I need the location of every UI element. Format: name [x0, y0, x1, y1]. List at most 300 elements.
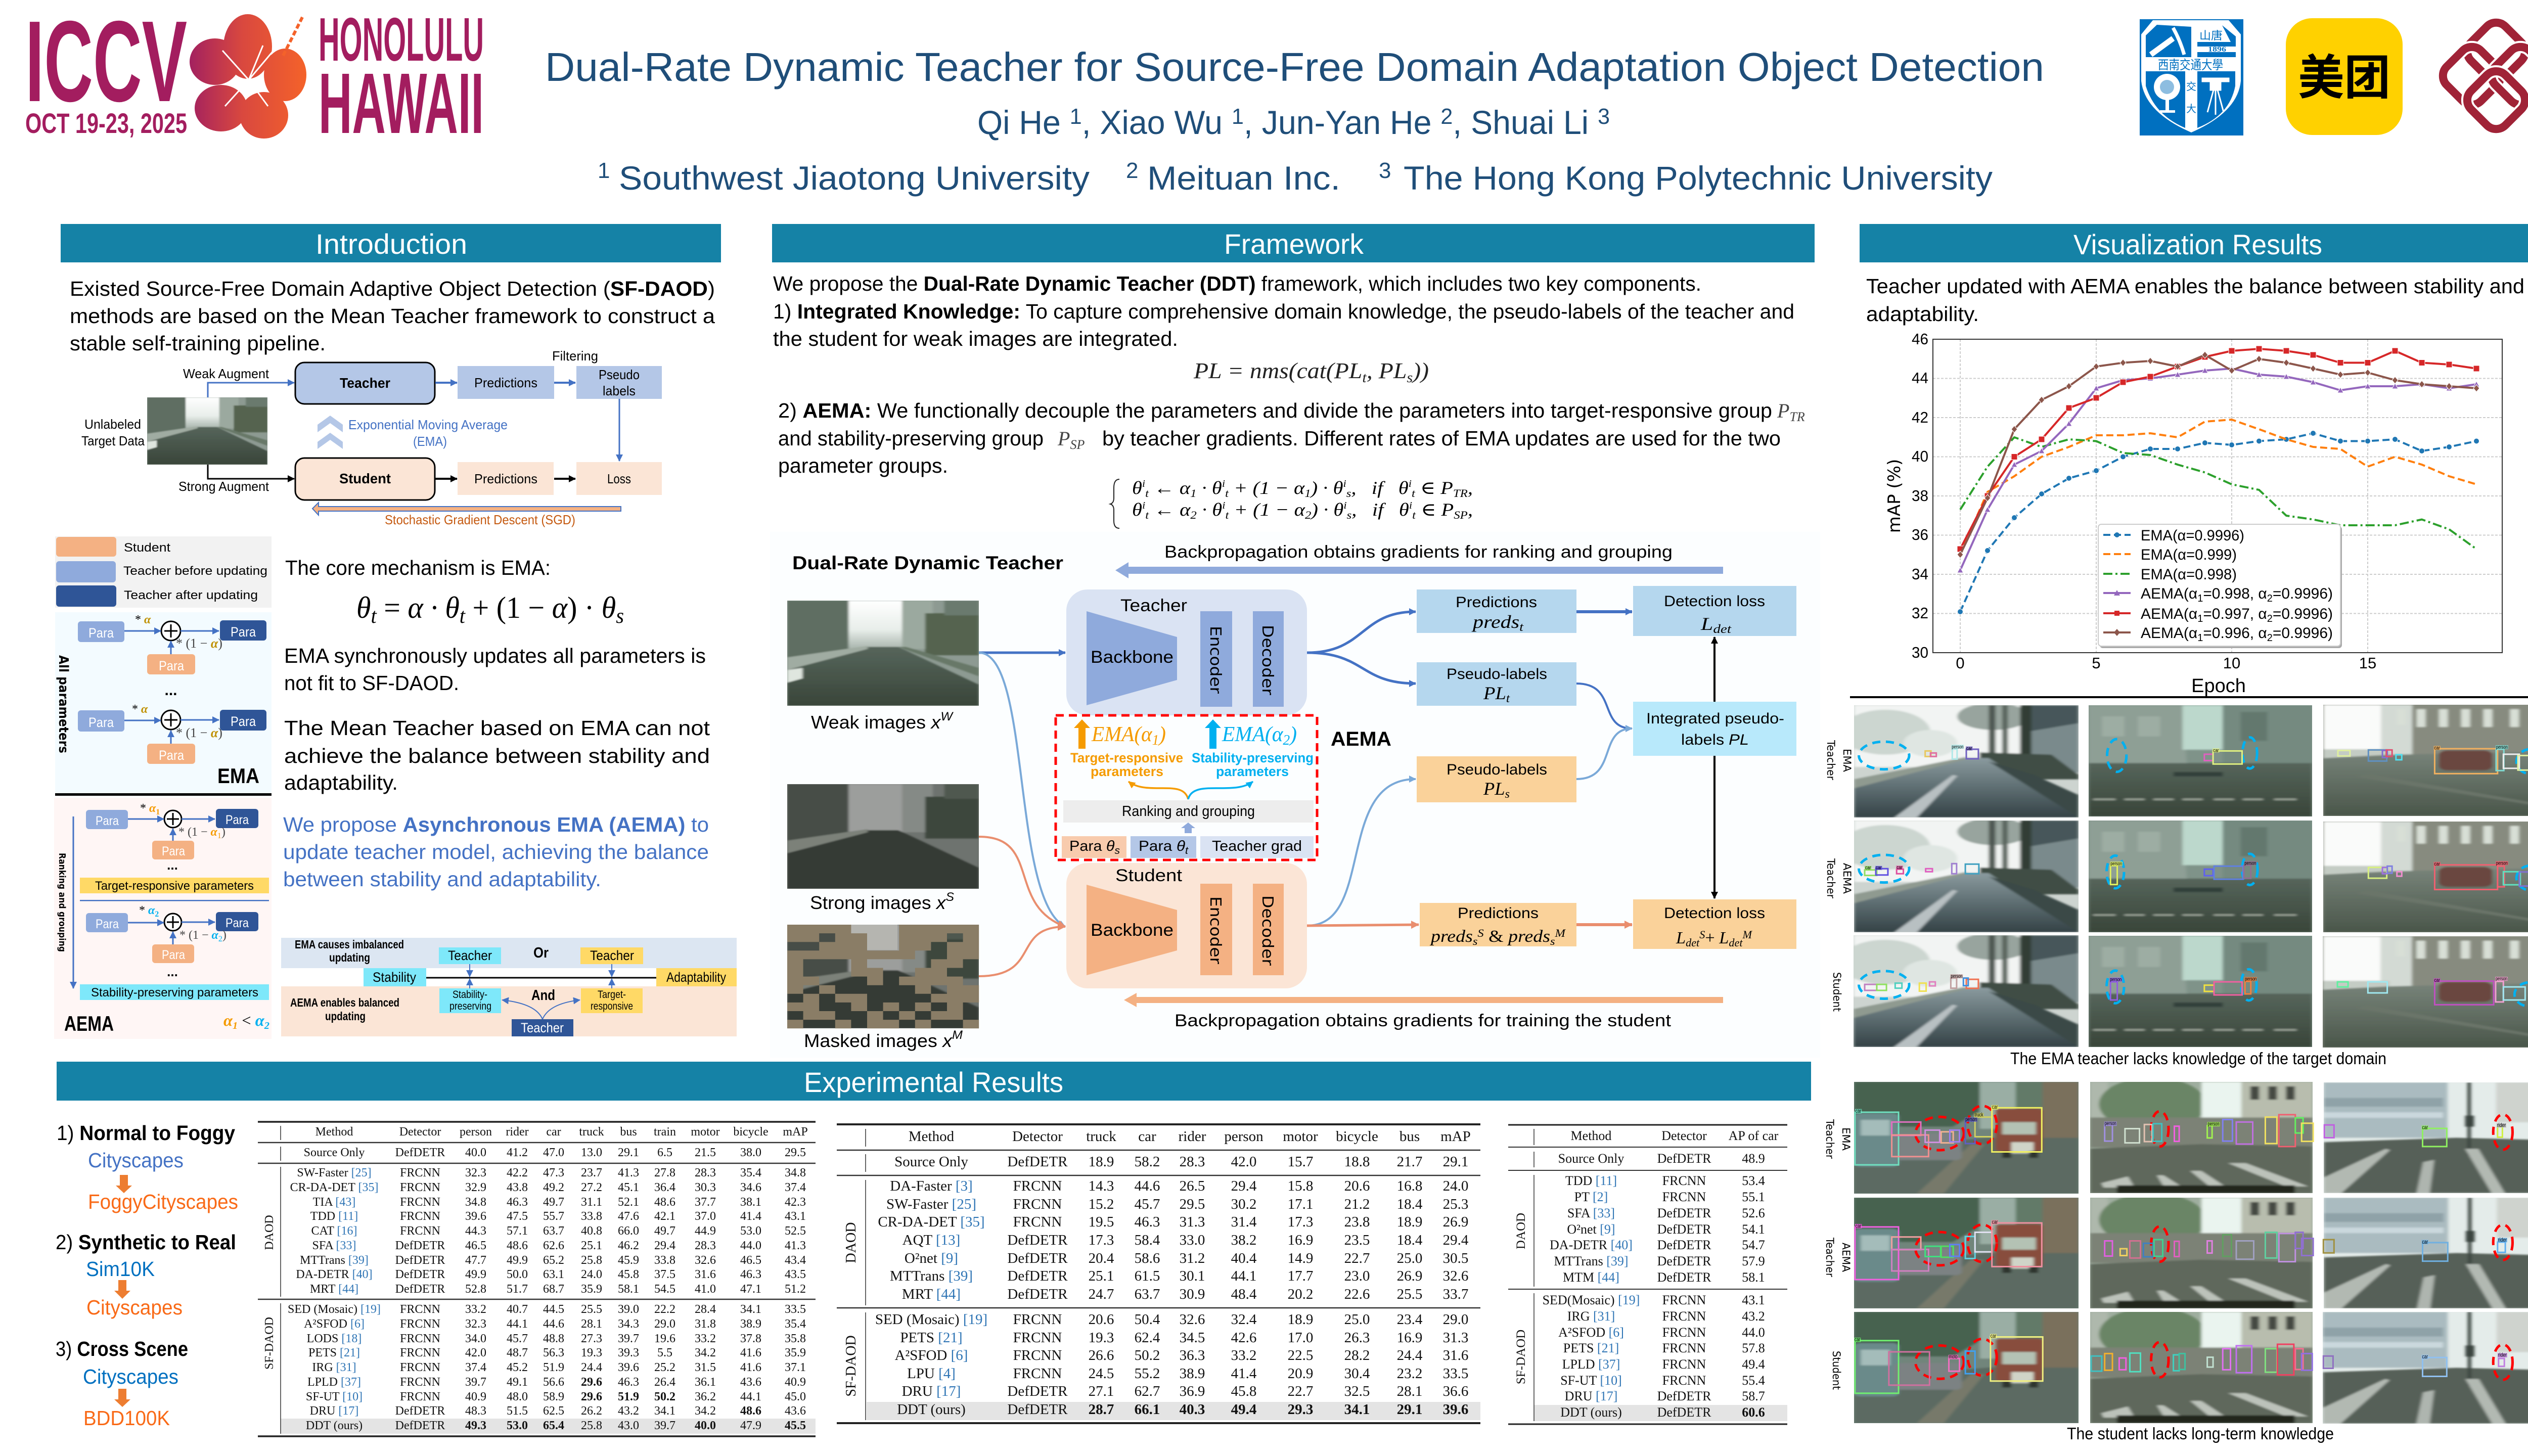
detections: long-term overlays: car: [1856, 1108, 1862, 1114]
table: Cross Scene results: 57.8: [1742, 1341, 1765, 1355]
table: Synthetic to Real results: 22.6: [1344, 1286, 1370, 1302]
table: Synthetic to Real results: 25.3: [1443, 1196, 1468, 1212]
table: Synthetic to Real results: [875, 1128, 1471, 1418]
table: Normal to Foggy results: 46.5: [740, 1254, 761, 1267]
table: Normal to Foggy results: 63.1: [543, 1268, 564, 1281]
table: Synthetic to Real results: SED (Mosaic) [19]: [875, 1311, 987, 1328]
table: Normal to Foggy results: DefDETR: [395, 1146, 445, 1159]
table: Synthetic to Real results: 30.1: [1180, 1268, 1205, 1284]
table: Normal to Foggy results: 27.3: [581, 1332, 602, 1345]
table: Normal to Foggy results: 33.8: [581, 1210, 602, 1223]
table: Synthetic to Real results: 58.2: [1135, 1154, 1160, 1170]
list: adaptation scenarios: 3) Cross Scene: [56, 1337, 188, 1360]
diagram: imbalanced vs balanced updating: Target-: [598, 989, 626, 1000]
text block: AEMA description: [778, 399, 1805, 477]
table: Cross Scene results: AP of car: [1729, 1128, 1778, 1143]
table: Cross Scene results: 58.1: [1742, 1270, 1765, 1285]
diagram: dual-rate dynamic teacher: S: [945, 890, 954, 904]
authors: 2: [1440, 104, 1453, 129]
line chart: mAP by epoch: 44: [1912, 369, 1928, 387]
outputs: student predictions and detection loss: preds: [1508, 927, 1546, 946]
table: Synthetic to Real results: 20.2: [1288, 1286, 1313, 1302]
table: Normal to Foggy results: 28.3: [695, 1239, 716, 1252]
diagram: AEMA grouped parameters: Para: [225, 813, 249, 827]
table: Cross Scene results: MTTrans [39]: [1554, 1254, 1629, 1268]
formula: AEMA update rule: ∈ P: [1416, 499, 1454, 520]
conference logo: ICCV Honolulu Hawaii: [25, 0, 484, 152]
table: Cross Scene results: PT [2]: [1574, 1190, 1608, 1204]
panel: AEMA dashed box: Para θ: [1139, 838, 1185, 854]
diagram: imbalanced vs balanced updating: preserving: [449, 1000, 491, 1012]
table: Normal to Foggy results: 51.9: [543, 1361, 564, 1374]
table: Synthetic to Real results: 32.6: [1180, 1311, 1205, 1328]
table: Synthetic to Real results: 30.5: [1443, 1250, 1468, 1266]
diagram: AEMA grouped parameters: Para: [96, 814, 119, 828]
table: Normal to Foggy results: 25.8: [581, 1419, 602, 1432]
detections: target-domain overlays: car: [2213, 748, 2219, 753]
diagram: imbalanced vs balanced updating: responsive: [591, 1000, 633, 1012]
table: Normal to Foggy results: bus: [620, 1125, 637, 1139]
formula: AEMA update rule: 2: [1190, 509, 1197, 521]
table: Normal to Foggy results: 47.0: [543, 1146, 564, 1159]
table: Normal to Foggy results: 34.8: [785, 1166, 806, 1179]
table: Cross Scene results: DefDETR: [1657, 1206, 1711, 1220]
detections: long-term overlays: truck: [1974, 1112, 1983, 1118]
caption: EMA teacher: The EMA teacher lacks knowledge of the target domain: [2010, 1049, 2386, 1068]
table: Synthetic to Real results: CR-DA-DET [35]: [878, 1214, 985, 1230]
table: Normal to Foggy results: 37.4: [785, 1181, 806, 1194]
heading: experimental results: [57, 1062, 1811, 1101]
text block: DDT overview: We propose the Dual-Rate Dynamic Teacher (DDT) framework, which includes two key components.: [773, 272, 1701, 295]
table: Normal to Foggy results: 40.0: [695, 1419, 716, 1432]
table: Cross Scene results: FRCNN: [1662, 1373, 1706, 1388]
detections: long-term overlays: car: [1992, 1219, 1998, 1225]
table: Normal to Foggy results: 43.6: [785, 1404, 806, 1418]
text block: stability and adaptability: [284, 716, 710, 794]
table: Normal to Foggy results: 55.7: [543, 1210, 564, 1223]
table: Normal to Foggy results: 37.1: [785, 1361, 806, 1374]
formula: pseudo-label integration: t: [1362, 370, 1367, 386]
outputs: teacher predictions and detection loss: Detection loss: [1664, 593, 1765, 610]
table: Cross Scene results: TDD [11]: [1565, 1173, 1617, 1188]
table: Normal to Foggy results: 28.1: [581, 1317, 602, 1331]
table: Normal to Foggy results: 66.0: [618, 1224, 639, 1238]
table: Synthetic to Real results: AQT [13]: [902, 1232, 960, 1248]
panel: AEMA dashed box: 1: [1152, 733, 1159, 748]
chart legend: =0.998, α: [2203, 585, 2267, 602]
diagram: mean teacher pipeline: Unlabeled: [84, 417, 141, 432]
diagram: AEMA grouped parameters: ...: [167, 964, 178, 979]
row labels: long-term comparison: Teacher: [1824, 1237, 1836, 1277]
table: Normal to Foggy results: FRCNN: [400, 1332, 440, 1345]
table: Synthetic to Real results: 22.7: [1344, 1250, 1370, 1266]
formula: AEMA update rule: 1: [1304, 487, 1311, 499]
affiliations: 3: [1379, 158, 1391, 183]
formula: AEMA update rule: t: [1412, 509, 1416, 521]
table: Normal to Foggy results: LODS [18]: [307, 1332, 362, 1345]
table: Synthetic to Real results: 61.5: [1135, 1268, 1160, 1284]
heading: introduction: Introduction: [315, 228, 467, 260]
table: Normal to Foggy results: 22.2: [654, 1303, 675, 1316]
formula: AEMA update rule: TR: [1453, 487, 1468, 499]
table: Synthetic to Real results: DRU [17]: [902, 1383, 961, 1399]
outputs: teacher predictions and detection loss: preds: [1473, 612, 1513, 632]
table: Cross Scene results: FRCNN: [1662, 1190, 1706, 1204]
table: Synthetic to Real results: 33.7: [1443, 1286, 1468, 1302]
formula: EMA update: + (1 −: [465, 591, 552, 624]
panel: AEMA dashed box: [1056, 715, 1317, 860]
outputs: student predictions and detection loss: S: [1477, 927, 1484, 939]
table: Synthetic to Real results: 26.9: [1443, 1214, 1468, 1230]
panel: AEMA dashed box: Stability-preserving: [1192, 750, 1314, 765]
table: Normal to Foggy results: mAP: [783, 1125, 808, 1139]
text block: DDT overview: the student for weak images are integrated.: [773, 327, 1178, 350]
affiliations: 1: [598, 158, 610, 183]
diagram: EMA all parameters: ...: [164, 682, 177, 699]
list: adaptation scenarios: Sim10K: [86, 1257, 155, 1281]
table: Cross Scene results: 54.7: [1742, 1238, 1765, 1252]
logo: Hong Kong Polytechnic University: [2437, 17, 2528, 134]
table: Normal to Foggy results: 32.6: [695, 1254, 716, 1267]
detections: target-domain overlays: person: [2110, 861, 2122, 867]
panel: visualization results: [1824, 224, 2528, 1443]
table: Synthetic to Real results: 33.0: [1180, 1232, 1205, 1248]
table: Normal to Foggy results: 41.2: [507, 1146, 528, 1159]
table: Normal to Foggy results: SFA [33]: [312, 1239, 356, 1252]
table: Normal to Foggy results: 46.5: [465, 1239, 486, 1252]
panel: AEMA dashed box: EMA(α: [1222, 723, 1284, 746]
table: Synthetic to Real results: 49.4: [1231, 1401, 1256, 1418]
table: Normal to Foggy results: 5.5: [657, 1346, 672, 1359]
outputs: teacher predictions and detection loss: L: [1701, 614, 1711, 634]
table: Synthetic to Real results: 29.0: [1443, 1311, 1468, 1328]
detections: long-term overlays: person: [2208, 1121, 2220, 1127]
table: Normal to Foggy results: 42.0: [465, 1346, 486, 1359]
table: Synthetic to Real results: 36.3: [1180, 1347, 1205, 1363]
diagram: mean teacher pipeline: Loss: [607, 471, 631, 486]
formula: AEMA update rule: i: [1409, 500, 1412, 511]
chart legend: 1: [2197, 613, 2203, 624]
table: Synthetic to Real results: 63.7: [1135, 1286, 1160, 1302]
table: Normal to Foggy results: 33.2: [695, 1332, 716, 1345]
diagram: imbalanced vs balanced updating: Teacher: [448, 948, 492, 963]
table: Cross Scene results: DDT (ours): [1560, 1405, 1622, 1420]
formula: EMA update: α) · θ: [552, 591, 616, 624]
diagram: AEMA grouped parameters: Stability-preserving parameters: [91, 986, 258, 999]
panel: teacher model: [1066, 589, 1307, 715]
formula: AEMA update rule: [1110, 478, 1473, 528]
table: Synthetic to Real results: 15.8: [1288, 1178, 1313, 1194]
chart legend: EMA(α=0.999): [2141, 547, 2237, 563]
detections: target-domain overlays: person: [2110, 977, 2121, 982]
table: Normal to Foggy results: 31.1: [581, 1195, 602, 1208]
table: Synthetic to Real results: 15.7: [1288, 1154, 1313, 1170]
table: Synthetic to Real results: mAP: [1440, 1128, 1471, 1145]
diagram: AEMA grouped parameters: α: [255, 1011, 265, 1029]
table: Normal to Foggy results: 32.3: [465, 1166, 486, 1179]
table: Normal to Foggy results: FRCNN: [400, 1390, 440, 1403]
table: Normal to Foggy results: 32.3: [465, 1317, 486, 1331]
logo: Southwest Jiaotong University: [2140, 19, 2243, 135]
table: Cross Scene results: 57.9: [1742, 1254, 1765, 1268]
table: Synthetic to Real results: 16.9: [1397, 1330, 1422, 1346]
table: Normal to Foggy results: 44.3: [465, 1224, 486, 1238]
image grid: student lacks long-term knowledge: [1854, 1077, 2528, 1424]
table: Synthetic to Real results: 42.0: [1231, 1154, 1256, 1170]
formula: AEMA update rule: i: [1222, 500, 1225, 511]
diagram: mean teacher pipeline: Stochastic Gradient Descent (SGD): [385, 512, 575, 527]
list: adaptation scenarios: [56, 1121, 238, 1430]
diagram: EMA all parameters: * α: [135, 613, 151, 626]
table: Synthetic to Real results: 28.3: [1180, 1154, 1205, 1170]
table: Normal to Foggy results: 58.9: [543, 1390, 564, 1403]
table: Cross Scene results: FRCNN: [1662, 1293, 1706, 1307]
text block: AEMA proposal: update teacher model, achieving the balance: [283, 840, 709, 863]
panel: introduction: [54, 224, 737, 1039]
table: Normal to Foggy results: 35.4: [785, 1317, 806, 1331]
table: Normal to Foggy results: MRT [44]: [310, 1283, 358, 1296]
diagram: mean teacher pipeline: Weak Augment: [183, 366, 269, 381]
authors: Qi He: [977, 104, 1063, 141]
table: Cross Scene results: 44.0: [1742, 1325, 1765, 1340]
diagram: dual-rate dynamic teacher: [770, 532, 1820, 1058]
row labels: long-term comparison: Teacher: [1824, 1119, 1836, 1159]
table: Normal to Foggy results: DefDETR: [395, 1239, 445, 1252]
table: Cross Scene results: A²SFOD [6]: [1558, 1325, 1624, 1340]
heading: visualization results: Visualization Results: [2073, 229, 2322, 260]
table: Normal to Foggy results: CAT [16]: [311, 1224, 357, 1238]
table: Cross Scene results: DefDETR: [1657, 1151, 1711, 1166]
table: Cross Scene results: DefDETR: [1657, 1405, 1711, 1420]
table: Normal to Foggy results: 38.9: [740, 1317, 761, 1331]
table: Synthetic to Real results: 25.0: [1397, 1250, 1422, 1266]
formula: AEMA update rule: , if θ: [1351, 499, 1409, 520]
line chart: mAP by epoch: 38: [1912, 487, 1928, 505]
table: Cross Scene results: O²net [9]: [1567, 1222, 1615, 1237]
table: Synthetic to Real results: 40.4: [1231, 1250, 1256, 1266]
detections: target-domain overlays: car: [1966, 746, 1972, 751]
table: Synthetic to Real results: 36.9: [1180, 1383, 1205, 1399]
table rules and highlights: SF-DAOD: [843, 1335, 859, 1397]
outputs: teacher predictions and detection loss: PL: [1483, 683, 1505, 703]
diagram: EMA all parameters: Para: [88, 625, 114, 641]
table: Normal to Foggy results: 25.8: [581, 1254, 602, 1267]
table: Cross Scene results: DefDETR: [1657, 1254, 1711, 1268]
outputs: student predictions and detection loss: s: [1550, 935, 1555, 947]
text block: AEMA proposal: [283, 813, 709, 891]
table: Normal to Foggy results: FRCNN: [400, 1210, 440, 1223]
detections: long-term overlays: car: [2422, 1124, 2428, 1130]
line chart: mAP by epoch: 42: [1912, 408, 1928, 426]
table: Synthetic to Real results: 44.1: [1231, 1268, 1256, 1284]
table: Synthetic to Real results: 17.1: [1288, 1196, 1313, 1212]
diagram: AEMA grouped parameters: <: [238, 1011, 255, 1029]
table: Normal to Foggy results: PETS [21]: [308, 1346, 360, 1359]
table: Cross Scene results: FRCNN: [1662, 1341, 1706, 1355]
panel: experimental results: [56, 1062, 1811, 1436]
panel: AEMA dashed box: Teacher grad: [1212, 838, 1302, 854]
outputs: student predictions and detection loss: s: [1505, 788, 1510, 801]
chart legend: 2: [2267, 632, 2273, 644]
table: Synthetic to Real results: 26.3: [1344, 1330, 1370, 1346]
table: Synthetic to Real results: 21.7: [1397, 1154, 1422, 1170]
diagram: dual-rate dynamic teacher: Backpropagation obtains gradients for ranking and grouping: [1164, 542, 1673, 562]
conference logo: ICCV Honolulu Hawaii: OCT 19-23, 2025: [25, 107, 187, 139]
formula: AEMA update rule: t: [1412, 487, 1416, 499]
list: adaptation scenarios: Cityscapes: [86, 1296, 183, 1319]
row labels: target-domain comparison: Teacher: [1825, 858, 1837, 898]
table: Normal to Foggy results: 37.0: [695, 1210, 716, 1223]
panel: student model: [1066, 863, 1307, 988]
detections: long-term overlays: car: [1991, 1333, 1997, 1339]
text block: AEMA description: 2) AEMA: We functionally decouple the parameters and divide the parameters into target-responsive group: [778, 399, 1772, 422]
diagram: EMA all parameters: Para: [159, 658, 185, 673]
table: Normal to Foggy results: LPLD [37]: [307, 1376, 361, 1389]
table: Normal to Foggy results: FRCNN: [400, 1224, 440, 1238]
table: Normal to Foggy results: 25.2: [654, 1361, 675, 1374]
text block: EMA limitation: not fit to SF-DAOD.: [284, 671, 459, 695]
row labels: long-term comparison: AEMA: [1840, 1243, 1852, 1272]
table: Cross Scene results: PETS [21]: [1563, 1341, 1619, 1355]
chart legend: 2: [2267, 593, 2273, 604]
detections: target-domain overlays: car: [1897, 865, 1903, 871]
formula: AEMA update rule: θ: [1132, 478, 1141, 498]
table: Normal to Foggy results: 51.5: [507, 1404, 528, 1418]
table: Synthetic to Real results: MTTrans [39]: [890, 1268, 973, 1284]
table: Normal to Foggy results: 52.5: [785, 1224, 806, 1238]
formula: AEMA update rule: θ: [1132, 499, 1141, 520]
table: Synthetic to Real results: 16.9: [1288, 1232, 1313, 1248]
chart legend: =0.996, α: [2203, 625, 2267, 642]
table: Synthetic to Real results: 39.6: [1443, 1401, 1468, 1418]
table: Normal to Foggy results: 62.6: [543, 1239, 564, 1252]
table: Synthetic to Real results: 23.4: [1397, 1311, 1422, 1328]
table: Normal to Foggy results: [288, 1125, 808, 1432]
chart legend: =0.9996): [2273, 585, 2333, 602]
diagram: AEMA grouped parameters: 1: [156, 808, 160, 816]
table: Synthetic to Real results: FRCNN: [1013, 1311, 1062, 1328]
diagram: EMA all parameters: EMA: [217, 764, 259, 788]
table: Synthetic to Real results: DDT (ours): [897, 1401, 966, 1418]
chart legend: =0.997, α: [2203, 606, 2267, 622]
table: Cross Scene results: FRCNN: [1662, 1173, 1706, 1188]
diagram: dual-rate dynamic teacher: W: [940, 710, 954, 723]
diagram: AEMA grouped parameters: 1: [217, 832, 221, 840]
table: Synthetic to Real results: 24.5: [1089, 1366, 1114, 1382]
list: adaptation scenarios: Cityscapes: [83, 1365, 178, 1388]
line chart: mAP by epoch: 46: [1912, 330, 1928, 348]
panel: AEMA dashed box: t: [1185, 845, 1189, 856]
conference logo: ICCV Honolulu Hawaii: HAWAII: [319, 56, 484, 152]
table: Normal to Foggy results: 49.7: [543, 1195, 564, 1208]
table: Cross Scene results: 43.2: [1742, 1309, 1765, 1324]
table: Normal to Foggy results: 23.7: [581, 1166, 602, 1179]
table: Normal to Foggy results: 36.1: [695, 1376, 716, 1389]
table: Synthetic to Real results: 26.6: [1089, 1347, 1114, 1363]
chart legend: =0.9996): [2273, 606, 2333, 622]
panel: AEMA dashed box: EMA(α: [1092, 723, 1153, 746]
outputs: integrated pseudo-labels: Integrated pseudo-: [1646, 710, 1784, 727]
table: Synthetic to Real results: 18.8: [1344, 1154, 1370, 1170]
table: Normal to Foggy results: 43.0: [618, 1419, 639, 1432]
table: Normal to Foggy results: 40.7: [507, 1303, 528, 1316]
panel: AEMA dashed box: ): [1158, 723, 1166, 746]
table: Normal to Foggy results: 40.8: [581, 1224, 602, 1238]
outputs: student predictions and detection loss: det: [1729, 936, 1743, 949]
table: Cross Scene results: 52.6: [1742, 1206, 1765, 1220]
table: Normal to Foggy results: 65.2: [543, 1254, 564, 1267]
table: Normal to Foggy results: 29.6: [581, 1376, 602, 1389]
authors: , Jun-Yan He: [1244, 104, 1440, 141]
formula: AEMA update rule: i: [1142, 478, 1145, 489]
outputs: teacher predictions and detection loss: [1417, 586, 1796, 706]
table: Synthetic to Real results: DefDETR: [1007, 1232, 1068, 1248]
row labels: long-term comparison: [1824, 1119, 1852, 1390]
row labels: long-term comparison: EMA: [1840, 1127, 1852, 1151]
table: Synthetic to Real results: rider: [1179, 1128, 1206, 1145]
table: Normal to Foggy results: 62.5: [543, 1404, 564, 1418]
table: Synthetic to Real results: 25.0: [1344, 1311, 1370, 1328]
table: Synthetic to Real results: person: [1224, 1128, 1263, 1145]
panel: student model: Backbone: [1091, 921, 1173, 940]
table: Normal to Foggy results: 29.1: [618, 1146, 639, 1159]
text block: stability and adaptability: adaptability.: [284, 771, 398, 794]
outputs: student predictions and detection loss: Detection loss: [1664, 905, 1765, 922]
text block: intro paragraph: [70, 277, 715, 355]
table: Normal to Foggy results: 48.0: [507, 1390, 528, 1403]
detections: target-domain overlays: car: [1876, 865, 1882, 871]
table rules and highlights: DAOD: [843, 1222, 859, 1263]
table: Normal to Foggy results: 39.6: [618, 1361, 639, 1374]
table: Synthetic to Real results: 22.7: [1288, 1383, 1313, 1399]
table: Normal to Foggy results: 34.1: [654, 1404, 675, 1418]
diagram: AEMA grouped parameters: * (1 − α: [179, 929, 218, 942]
table: Normal to Foggy results: 47.5: [507, 1210, 528, 1223]
table: Normal to Foggy results: 44.5: [543, 1303, 564, 1316]
detections: long-term overlays: rider: [2498, 1352, 2507, 1358]
detections: long-term overlays: car: [1855, 1337, 1861, 1343]
table: Cross Scene results: 55.1: [1742, 1190, 1765, 1204]
panel: teacher model: Backbone: [1091, 648, 1173, 667]
table: Synthetic to Real results: 17.0: [1288, 1330, 1313, 1346]
table: Normal to Foggy results: 24.4: [581, 1361, 602, 1374]
table: Synthetic to Real results: 14.3: [1089, 1178, 1114, 1194]
table: Normal to Foggy results: 44.6: [543, 1317, 564, 1331]
detections: target-domain overlays: person: [2245, 976, 2256, 982]
text block: visualization intro: [1866, 275, 2524, 326]
table: Synthetic to Real results: MRT [44]: [902, 1286, 961, 1302]
text block: AEMA proposal: between stability and adaptability.: [283, 868, 601, 891]
diagram: dual-rate dynamic teacher: AEMA: [1331, 728, 1391, 750]
diagram: EMA all parameters: Para: [231, 714, 256, 729]
table: Synthetic to Real results: 62.7: [1135, 1383, 1160, 1399]
table: Normal to Foggy results: FRCNN: [400, 1376, 440, 1389]
logo: Southwest Jiaotong University: 交: [2186, 81, 2196, 93]
table: Cross Scene results: SF-UT [10]: [1560, 1373, 1622, 1388]
detections: target-domain overlays: car: [2434, 978, 2440, 983]
outputs: student predictions and detection loss: S: [1699, 928, 1705, 941]
text block: visualization intro: adaptability.: [1866, 302, 1979, 326]
line chart: mAP by epoch: 36: [1912, 526, 1928, 543]
table: Synthetic to Real results: DefDETR: [1007, 1268, 1068, 1284]
diagram: dual-rate dynamic teacher: Backpropagation obtains gradients for training the student: [1175, 1011, 1672, 1030]
table: Synthetic to Real results: 24.7: [1089, 1286, 1114, 1302]
table: Cross Scene results: DRU [17]: [1565, 1389, 1617, 1403]
line chart: mAP by epoch: 0: [1956, 654, 1965, 672]
table: Normal to Foggy results: 27.2: [581, 1181, 602, 1194]
table: Synthetic to Real results: 26.9: [1397, 1268, 1422, 1284]
text block: intro paragraph: methods are based on the Mean Teacher framework to construct a: [70, 304, 715, 328]
